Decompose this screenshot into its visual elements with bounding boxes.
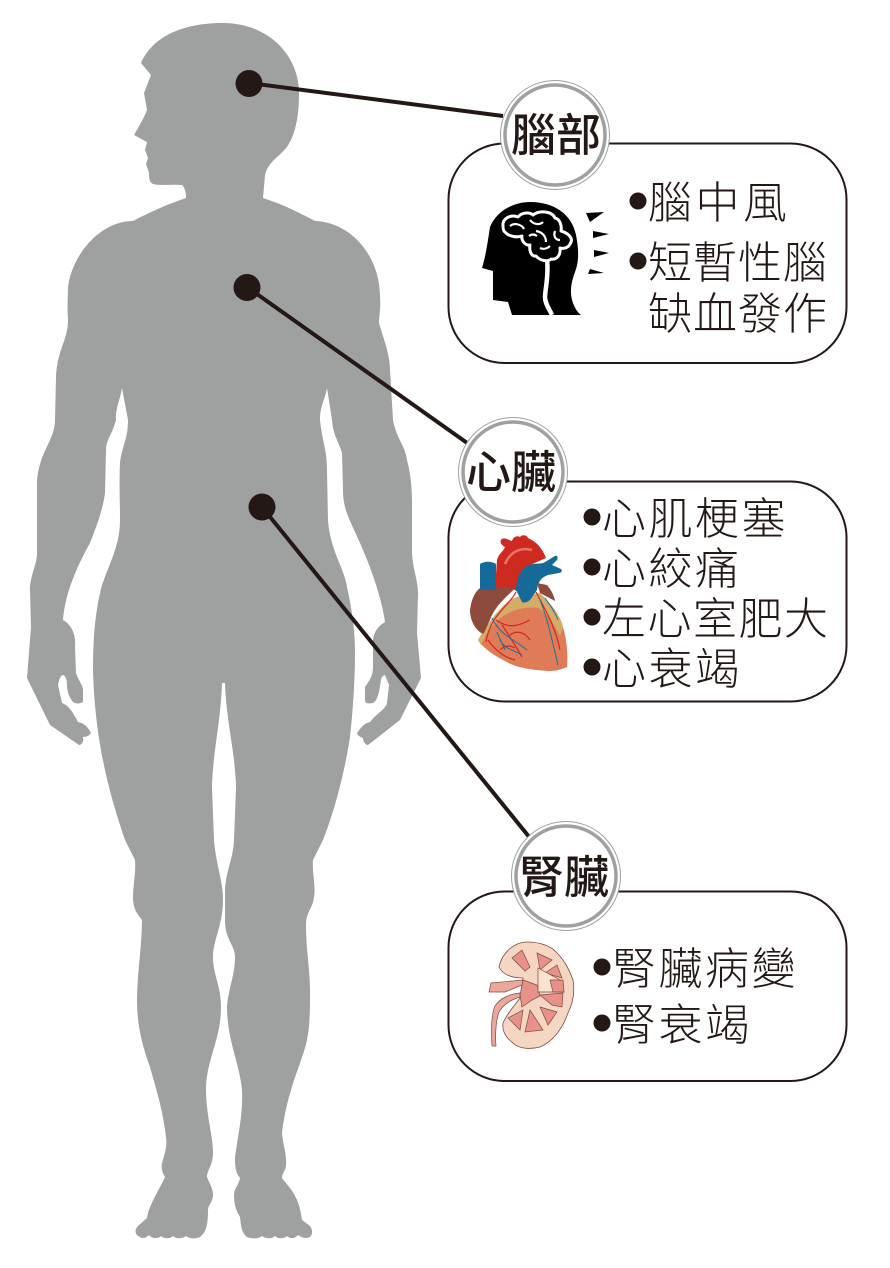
badge: kidney: 腎臟 — [519, 852, 609, 903]
bullet list: brain: 腦中風 — [648, 179, 790, 228]
icon: kidney — [489, 942, 574, 1048]
bullet list: brain: 短暫性腦 — [648, 239, 828, 288]
bullet list: brain — [630, 179, 828, 339]
badge: kidney — [512, 822, 620, 930]
panel: heart — [448, 482, 846, 702]
icon: head with brain — [482, 202, 609, 315]
connector: head to brain — [236, 70, 503, 116]
panel: kidney — [448, 892, 846, 1081]
panel: brain — [448, 144, 846, 363]
bullet list: heart: 心肌梗塞 — [602, 495, 788, 544]
human body silhouette — [27, 23, 421, 1238]
badge: brain: 腦部 — [511, 110, 601, 161]
badge: heart: 心臟 — [466, 447, 556, 498]
icon: heart — [470, 535, 567, 671]
bullet list: heart: 心絞痛 — [602, 545, 742, 594]
bullet list: heart — [584, 495, 830, 694]
connector: chest to heart — [234, 274, 470, 445]
bullet list: brain: 缺血發作 — [648, 290, 828, 339]
bullet list: heart: 左心室肥大 — [602, 595, 830, 644]
connector: abdomen to kidney — [248, 494, 530, 838]
badge: heart — [458, 418, 568, 526]
bullet list: heart: 心衰竭 — [602, 645, 742, 694]
badge: brain — [500, 80, 610, 190]
bullet list: kidney: 腎衰竭 — [612, 1001, 752, 1050]
bullet list: kidney — [594, 945, 798, 1050]
bullet list: kidney: 腎臟病變 — [612, 945, 798, 994]
